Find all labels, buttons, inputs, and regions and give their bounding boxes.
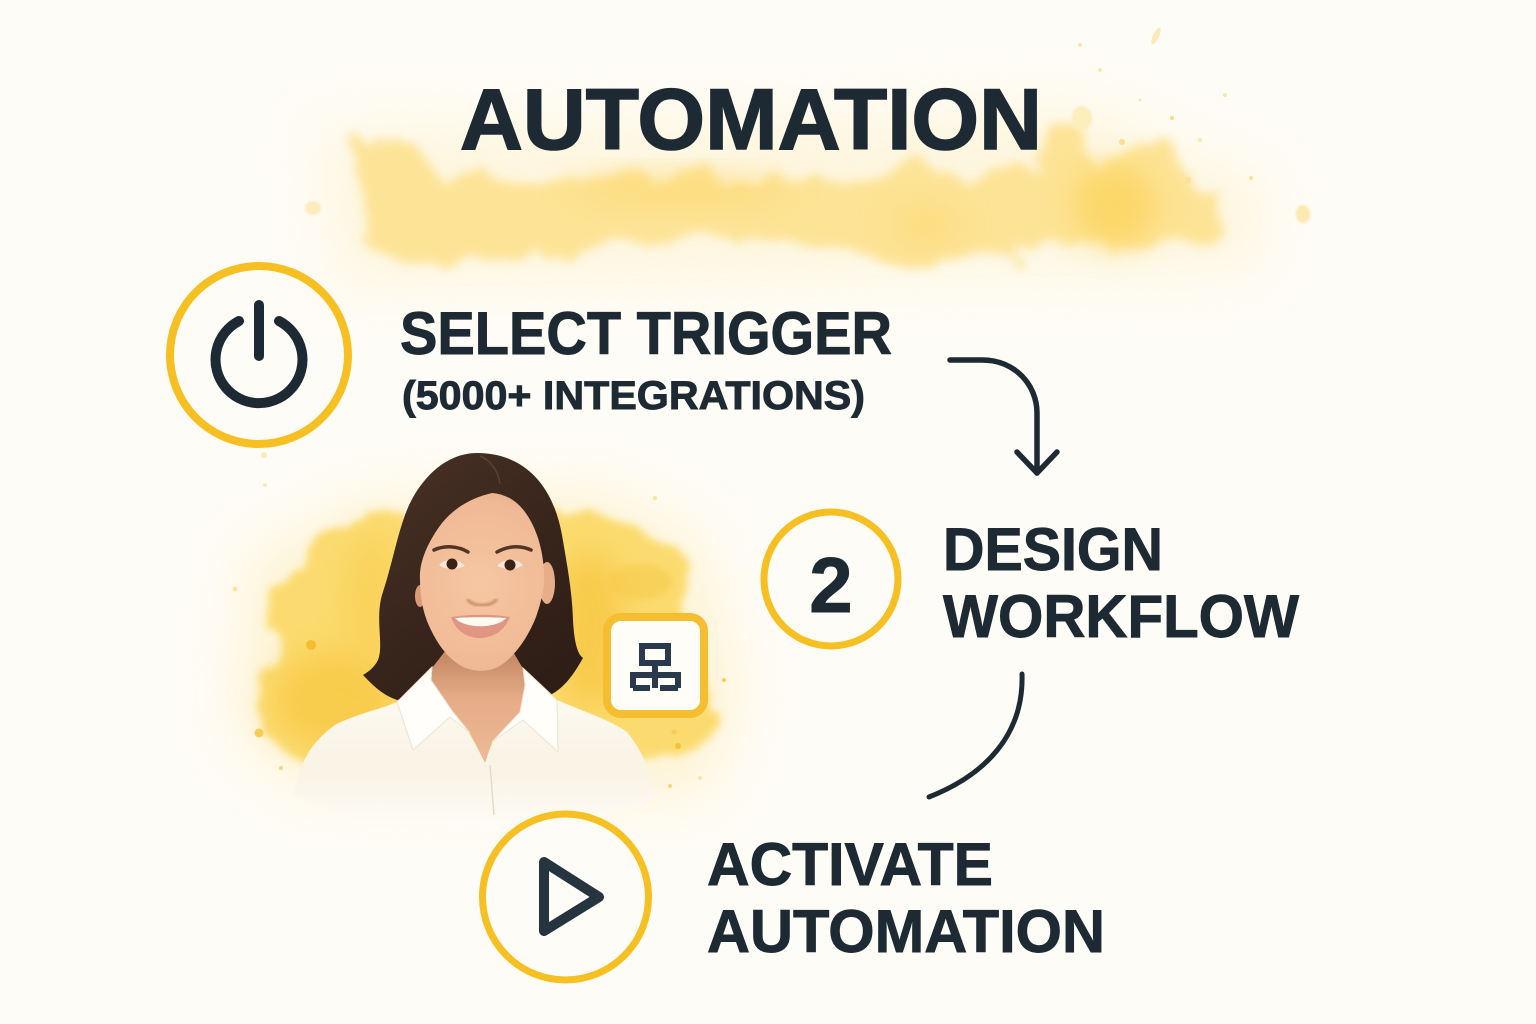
icon: org chart [633,646,678,688]
watercolor brush stroke behind title [305,27,1310,285]
arrow: step 1 to step 2 [950,360,1057,473]
badge: workflow icon [607,617,704,714]
step 2: number badge [764,512,898,646]
step 1 label: (5000+ INTEGRATIONS) [402,374,865,418]
step 2: number badge: 2 [809,541,853,629]
right eye [497,560,523,570]
face [420,493,544,671]
step 1: power icon [170,266,348,444]
step 2 label [943,516,1299,650]
step 3: play icon [482,814,648,980]
left ear [415,585,425,607]
step 1 label: SELECT TRIGGER [400,300,892,367]
shirt placket [490,765,494,815]
step 2 label: WORKFLOW [943,583,1299,650]
left eye [439,558,465,570]
right ear [539,562,555,604]
collar right [492,668,558,752]
watercolor splash behind person [232,452,740,800]
step 3 label: AUTOMATION [707,898,1105,965]
step 3 label [707,831,1105,965]
shirt [294,672,656,832]
step 2 label: DESIGN [943,516,1163,583]
collar left [397,667,470,750]
mouth [451,615,510,638]
step 3 label: ACTIVATE [707,831,993,898]
title: AUTOMATION [460,72,1042,168]
neck [430,650,525,763]
person portrait [294,453,656,832]
hair part strands [480,456,500,484]
step 1 label [400,300,892,418]
nose [468,600,496,605]
arrow: step 2 to step 3 [929,674,1022,797]
brows [434,547,531,552]
hair [363,453,583,700]
